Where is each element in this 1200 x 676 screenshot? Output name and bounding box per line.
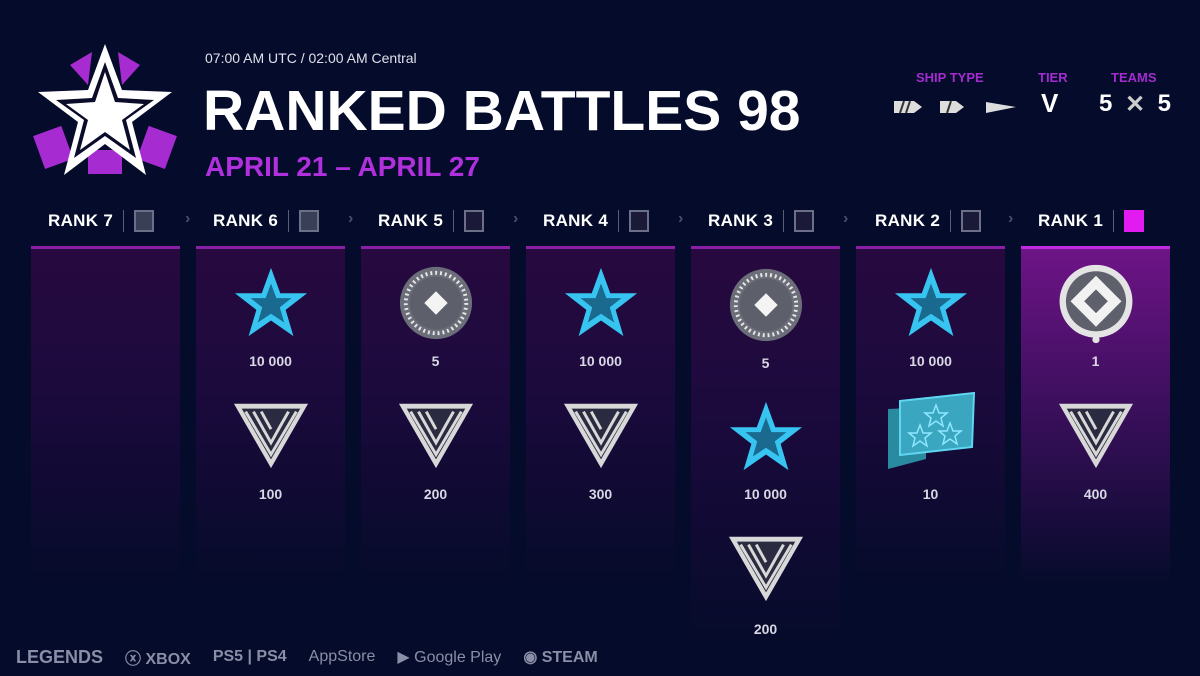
footer: platform logos (16, 647, 598, 668)
rank headers: RANK 4 (543, 211, 608, 230)
battle info: ship type, tier, teams: TEAMS (1111, 70, 1156, 85)
icon: flag (888, 392, 976, 469)
panel: rank 2 (856, 246, 1005, 586)
rank headers: › (1008, 210, 1013, 227)
rank headers: RANK 5 (378, 211, 443, 230)
panel: rank 5: 200 (424, 486, 447, 502)
logo: star emblem (33, 44, 177, 175)
battle info: ship type, tier, teams: 5 (1099, 90, 1112, 117)
panel: rank 7 (31, 246, 180, 586)
rank headers: RANK 7 (48, 211, 113, 230)
rank headers: › (348, 210, 353, 227)
panel: rank 4 (526, 246, 675, 586)
rank headers: RANK 6 (213, 211, 278, 230)
panel: rank 5 (361, 246, 510, 586)
panel: rank 1: 400 (1084, 486, 1107, 502)
battle info: ship type, tier, teams: ✕ (1125, 91, 1145, 118)
panel: rank 6 (196, 246, 345, 586)
battle info: ship type, tier, teams: SHIP TYPE (916, 70, 984, 85)
title: RANKED BATTLES 98 (203, 79, 800, 143)
footer: platform logos: ▶ Google Play (397, 649, 501, 666)
battle info: ship type, tier, teams (894, 70, 1171, 118)
panel: rank 5: 5 (432, 353, 439, 369)
battle info: ship type, tier, teams: 5 (1158, 90, 1171, 117)
rank headers: RANK 3 (708, 211, 773, 230)
footer: platform logos: AppStore (309, 648, 375, 665)
footer: platform logos: ◉ STEAM (523, 649, 598, 666)
battle info: ship type, tier, teams: V (1041, 88, 1058, 118)
panel: rank 6: 100 (259, 486, 282, 502)
panel: rank 1: 1 (1092, 353, 1099, 369)
panel: rank 3 (691, 246, 840, 646)
footer: platform logos: PS5 | PS4 (213, 648, 287, 665)
dates: APRIL 21 – APRIL 27 (205, 151, 480, 182)
footer: platform logos: LEGENDS (16, 647, 103, 667)
rank headers: › (513, 210, 518, 227)
panel: rank 3: 10 000 (744, 486, 787, 502)
panel: rank 2: 10 000 (909, 353, 952, 369)
panel: rank 3: 5 (762, 355, 769, 371)
time text: 07:00 AM UTC / 02:00 AM Central (205, 50, 417, 66)
panel: rank 2: 10 (923, 486, 938, 502)
panel: rank 4: 10 000 (579, 353, 622, 369)
rank headers: › (678, 210, 683, 227)
battle info: ship type, tier, teams: TIER (1038, 70, 1068, 85)
panel: rank 4: 300 (589, 486, 612, 502)
rank headers: RANK 2 (875, 211, 940, 230)
panel: rank 6: 10 000 (249, 353, 292, 369)
panel: rank 3: 200 (754, 621, 777, 637)
icon: laurel emblem (1060, 264, 1132, 344)
rank headers: › (185, 210, 190, 227)
rank headers (48, 210, 1144, 232)
rank headers: RANK 1 (1038, 211, 1103, 230)
rank headers: › (843, 210, 848, 227)
panel: rank 1 (1021, 246, 1170, 586)
footer: platform logos: ⓧ XBOX (125, 651, 191, 668)
